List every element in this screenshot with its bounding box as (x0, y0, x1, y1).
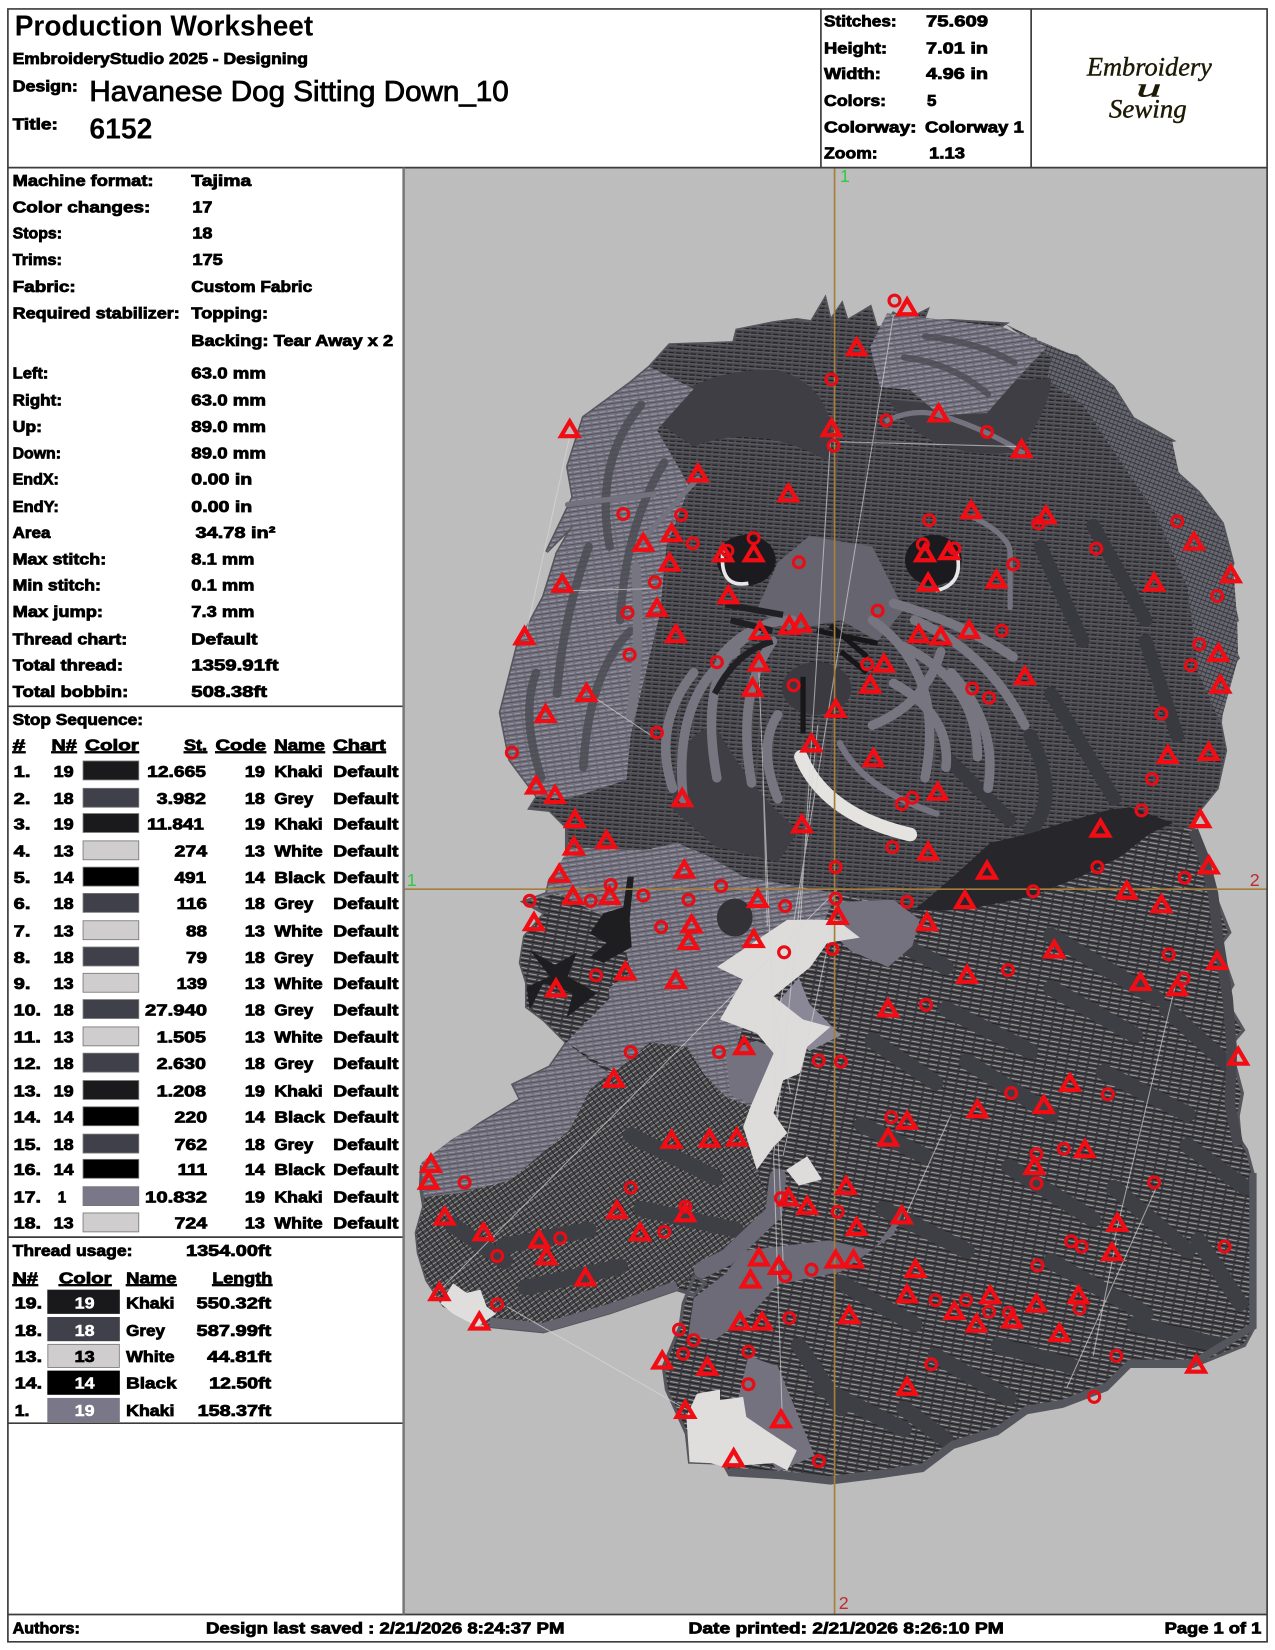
thread row 13: 13 (75, 1349, 95, 1366)
design stats block: Colorway: (824, 119, 917, 136)
design stats block: Zoom: (824, 146, 878, 163)
thread row 18: 18. (15, 1323, 42, 1340)
machine details list: Machine format: (13, 173, 153, 190)
stop row 10: 18 (245, 1002, 265, 1019)
logo: Embroidery (1086, 53, 1212, 82)
stop row 11 (14, 1027, 399, 1047)
table header (13, 737, 387, 754)
crosshair vertical (834, 168, 836, 1614)
machine details list: 63.0 mm (191, 393, 266, 410)
stop row 2: 2. (14, 791, 30, 808)
stop row 7: White (274, 924, 323, 941)
stop row 6: Grey (274, 896, 313, 913)
thread row 19: 19. (15, 1296, 42, 1313)
stop row 3: 3. (14, 816, 30, 833)
stop row 8: Grey (274, 950, 313, 967)
stop row 14: Default (333, 1110, 399, 1127)
stop row 1: 1. (14, 764, 30, 781)
machine details list: 7.3 mm (191, 604, 254, 621)
stop sequence heading: Stop Sequence: (13, 712, 143, 729)
title: Production Worksheet (15, 11, 314, 43)
machine details list: Stops: (13, 226, 62, 243)
logo: Sewing (1109, 95, 1187, 124)
stop row 16: Default (333, 1162, 399, 1179)
stop row 6 (14, 893, 399, 913)
axis labels: 2 (1250, 870, 1260, 890)
title label: Title: (13, 116, 58, 133)
stop row 14: 14. (14, 1110, 41, 1127)
footer: Authors: (13, 1620, 80, 1637)
stop row 1: 12.665 (147, 764, 206, 781)
table header: N# (52, 737, 77, 754)
table header: Chart (333, 737, 387, 754)
footer: Design last saved : 2/21/2026 8:24:37 PM (206, 1620, 564, 1637)
machine details list: 508.38ft (191, 684, 268, 701)
stop row 8: 18 (245, 950, 265, 967)
design name: Havanese Dog Sitting Down_10 (89, 76, 509, 108)
thread row 13 (15, 1344, 272, 1367)
stop row 14: Black (274, 1110, 325, 1127)
lower right hem (729, 1173, 1253, 1480)
thread row 13: 44.81ft (207, 1349, 272, 1366)
light fur: top of head (870, 313, 1047, 415)
thread usage table (13, 1243, 272, 1422)
stop row 11: 11. (14, 1030, 41, 1047)
stop row 13: 1.208 (157, 1083, 206, 1100)
left eye (717, 535, 776, 585)
light fur: left head fringe (500, 367, 694, 799)
machine details list: Fabric: (13, 279, 76, 296)
machine details list: Default (191, 631, 258, 648)
triangle markers (420, 300, 1247, 1465)
machine details list (13, 173, 393, 701)
dog silhouette: body (416, 299, 1253, 1483)
stop row 12: 2.630 (157, 1056, 206, 1073)
machine details list: Custom Fabric (191, 279, 312, 296)
stop sequence table (13, 712, 399, 1233)
stop row 3 (14, 814, 399, 833)
stop row 2: Default (333, 791, 399, 808)
footer: Date printed: 2/21/2026 8:26:10 PM (688, 1620, 1004, 1637)
chest lower lavender patch (725, 1041, 778, 1104)
thread row 14: 14. (15, 1375, 42, 1392)
stop row 11: 13 (245, 1030, 265, 1047)
stop row 11: 13 (54, 1030, 74, 1047)
stop row 13: Default (333, 1083, 399, 1100)
stop row 16: Black (274, 1162, 325, 1179)
stop row 16: 14 (245, 1162, 265, 1179)
lavender star on chest (773, 978, 841, 1051)
forearm bottom hem (490, 1285, 677, 1328)
machine details list: Down: (13, 445, 61, 462)
thread table header (13, 1270, 272, 1287)
stop row 14 (14, 1107, 399, 1127)
stop row 2: Grey (274, 791, 313, 808)
stop row 3: 11.841 (147, 816, 204, 833)
axis labels: 1 (407, 870, 417, 890)
stop row 13 (14, 1081, 399, 1100)
stop row 5: 14 (245, 870, 265, 887)
stop row 5: 5. (14, 870, 30, 887)
stop row 7: Default (333, 924, 399, 941)
stop row 1 (14, 761, 399, 781)
thread row 18 (15, 1317, 272, 1341)
axis labels: 1 (840, 166, 850, 186)
machine details list: Max stitch: (13, 551, 106, 568)
stop row 3: Khaki (274, 816, 323, 833)
stop row 3: 19 (54, 816, 74, 833)
stop row 5 (14, 867, 399, 887)
paw fur rays (688, 1209, 904, 1340)
machine details list: Up: (13, 419, 42, 436)
stop row 18: 724 (174, 1216, 207, 1233)
stop row 1: Default (333, 764, 399, 781)
thread row 18: 18 (75, 1323, 95, 1340)
thread row 19 (15, 1290, 272, 1314)
stop row 14: 14 (245, 1110, 265, 1127)
thread row 14 (15, 1371, 272, 1395)
stop row 7: 13 (245, 924, 265, 941)
right chest light fur (840, 900, 920, 967)
logo (1086, 53, 1212, 124)
stop row 8: 18 (54, 950, 74, 967)
stop row 16: 16. (14, 1162, 41, 1179)
stop row 17: Khaki (274, 1189, 323, 1206)
leg divider light fur (702, 1177, 778, 1270)
machine details list: 8.1 mm (191, 551, 254, 568)
stop row 8 (14, 947, 399, 967)
stop row 7: 13 (54, 924, 74, 941)
stop row 16: 111 (178, 1162, 207, 1179)
design label: Design: (13, 78, 78, 95)
stop row 4: 274 (174, 844, 207, 861)
stop row 12: 18 (245, 1056, 265, 1073)
tongue (801, 757, 910, 835)
forearm texture (416, 1043, 774, 1332)
machine details list: Left: (13, 365, 48, 382)
stop row 9: Default (333, 976, 399, 993)
thread row 1: 1. (15, 1403, 29, 1420)
muzzle fur rays (631, 568, 1025, 799)
stop row 4: Default (333, 844, 399, 861)
machine details list: 18 (192, 226, 213, 243)
thread row 19: 550.32ft (197, 1296, 272, 1313)
thread row 14: 12.50ft (209, 1375, 272, 1392)
machine details list: 175 (192, 252, 223, 269)
table header: Code (215, 737, 266, 754)
machine details list: EndX: (13, 472, 59, 489)
stop row 3: 19 (245, 816, 265, 833)
stop row 17: 10.832 (145, 1189, 207, 1206)
stop row 2 (14, 788, 399, 808)
stop row 18 (14, 1213, 399, 1233)
white chest fur (717, 920, 860, 1170)
design stats block: Height: (824, 41, 887, 58)
design stats block: Stitches: (824, 13, 897, 30)
machine details list: EndY: (13, 499, 59, 516)
table header: Name (274, 737, 325, 754)
machine details list: 17 (192, 199, 213, 216)
machine details list: Trims: (13, 252, 62, 269)
thread table header: N# (13, 1270, 38, 1287)
machine details list: Area (13, 525, 51, 542)
stop row 1: 19 (245, 764, 265, 781)
thread usage heading (13, 1243, 272, 1260)
thread table header: Color (59, 1270, 111, 1287)
stop row 18: 13 (245, 1216, 265, 1233)
thread row 18: Grey (126, 1323, 165, 1340)
stop row 13: 19 (54, 1083, 74, 1100)
upper arm light fur (422, 1043, 610, 1197)
stop row 16: 14 (54, 1162, 74, 1179)
left paw white (440, 1283, 496, 1326)
machine details list: 1359.91ft (191, 658, 280, 675)
machine details list: Thread chart: (13, 631, 127, 648)
stop row 4: 4. (14, 844, 30, 861)
machine details list: Max jump: (13, 604, 103, 621)
stop row 10: Grey (274, 1002, 313, 1019)
cheek dark tufts (946, 526, 1177, 830)
stop row 8: 8. (14, 950, 30, 967)
design stats block: Colors: (824, 93, 886, 110)
design stats block: Width: (824, 66, 881, 83)
machine details list: Tajima (191, 173, 252, 190)
thread row 1: 19 (75, 1403, 95, 1420)
machine details list: 89.0 mm (191, 445, 266, 462)
thread row 1: Khaki (126, 1403, 174, 1420)
design stats block: 1.13 (929, 146, 965, 163)
machine details list: 0.1 mm (191, 578, 254, 595)
chin fur arc (840, 743, 937, 814)
crosshair horizontal (405, 888, 1267, 890)
stop row 10: 10. (14, 1002, 41, 1019)
thread row 14: Black (126, 1375, 177, 1392)
stop row 8: Default (333, 950, 399, 967)
machine details list: 89.0 mm (191, 419, 266, 436)
design stats block (824, 13, 1024, 163)
embroidered dog illustration (416, 299, 1253, 1483)
stop row 18: Default (333, 1216, 399, 1233)
machine details list: Min stitch: (13, 578, 101, 595)
thread row 19: 19 (75, 1296, 95, 1313)
thread row 13: 13. (15, 1349, 42, 1366)
logo: u (1136, 74, 1161, 103)
stop row 6: Default (333, 896, 399, 913)
software line: EmbroideryStudio 2025 - Designing (13, 51, 308, 68)
neck light fur (523, 843, 837, 1107)
machine details list: Required stabilizer: (13, 305, 180, 322)
machine details list: Total bobbin: (13, 684, 128, 701)
stop row 10 (14, 1000, 399, 1019)
stop row 17: 19 (245, 1189, 265, 1206)
collar (913, 807, 1173, 910)
stop row 15: 18 (245, 1137, 265, 1154)
left fringe dark strands (529, 405, 664, 778)
stop row 11: 1.505 (157, 1030, 206, 1047)
axis labels (407, 166, 1260, 1613)
machine details list: 63.0 mm (191, 365, 266, 382)
footer: Page 1 of 1 (1165, 1620, 1262, 1637)
design stats block: 4.96 in (926, 66, 988, 83)
right eye (905, 535, 962, 591)
stop row 15: 18 (54, 1137, 74, 1154)
stop row 7: 7. (14, 924, 30, 941)
stop row 2: 18 (245, 791, 265, 808)
stop row 15: Grey (274, 1137, 313, 1154)
stop row 1: 19 (54, 764, 74, 781)
stop row 9 (14, 973, 399, 993)
dark neck oval (717, 899, 753, 937)
thread usage heading: 1354.00ft (186, 1243, 272, 1260)
stop row 18: White (274, 1216, 323, 1233)
stop row 15: 15. (14, 1137, 41, 1154)
stop row 18: 18. (14, 1216, 41, 1233)
stop row 10: 18 (54, 1002, 74, 1019)
stop row 17: 1 (58, 1189, 66, 1206)
stop row 5: Black (274, 870, 325, 887)
stop row 2: 18 (54, 791, 74, 808)
stop row 6: 116 (177, 896, 207, 913)
stop row 11: White (274, 1030, 323, 1047)
stop row 6: 18 (54, 896, 74, 913)
design stats block: Colorway 1 (925, 119, 1024, 136)
head right fringe (1005, 324, 1238, 723)
table header: # (13, 737, 26, 754)
stop row 9: 139 (177, 976, 207, 993)
stop row 4: 13 (245, 844, 265, 861)
stop row 9: 13 (54, 976, 74, 993)
machine details list: 0.00 in (191, 499, 252, 516)
stop row 13: 13. (14, 1083, 41, 1100)
stop row 12: 12. (14, 1056, 41, 1073)
table header: St. (184, 737, 207, 754)
stop row 14: 14 (54, 1110, 74, 1127)
stop row 15: Default (333, 1137, 399, 1154)
stop row 12 (14, 1053, 399, 1073)
machine details list: 0.00 in (191, 472, 252, 489)
table header: Color (85, 737, 139, 754)
stop row 5: 14 (54, 870, 74, 887)
stop row 4 (14, 841, 399, 861)
machine details list: Color changes: (13, 199, 150, 216)
stop row 9: White (274, 976, 323, 993)
stop row 7 (14, 921, 399, 941)
stop and trim markers (420, 295, 1247, 1466)
stop row 8: 79 (186, 950, 207, 967)
circle markers (459, 295, 1230, 1466)
stop row 12: Grey (274, 1056, 313, 1073)
stop row 4: White (274, 844, 323, 861)
head dark patches (652, 370, 1051, 862)
thread jump lines (440, 315, 1177, 1410)
stop row 18: 13 (54, 1216, 74, 1233)
footer (13, 1620, 1262, 1637)
left cheek mid fur (520, 913, 610, 1043)
stop row 9: 9. (14, 976, 30, 993)
stop row 10: 27.940 (145, 1002, 207, 1019)
stop row 7: 88 (186, 924, 207, 941)
stop row 15: 762 (174, 1137, 207, 1154)
axis labels: 2 (839, 1593, 849, 1613)
black neck patch 1 (527, 950, 597, 1017)
stop row 2: 3.982 (157, 791, 206, 808)
thread row 14: 14 (75, 1375, 95, 1392)
thread row 18: 587.99ft (197, 1323, 272, 1340)
stop row 4: 13 (54, 844, 74, 861)
muzzle bridge (757, 536, 904, 641)
thread row 1 (15, 1398, 272, 1422)
design stats block: 75.609 (926, 13, 988, 30)
front paw white (686, 1390, 797, 1470)
design stats block: 7.01 in (926, 41, 988, 58)
muzzle stripes (715, 604, 783, 694)
front paw lavender (736, 1356, 815, 1472)
stop row 15 (14, 1134, 399, 1154)
machine details list: Backing: Tear Away x 2 (191, 333, 393, 350)
stop row 6: 18 (245, 896, 265, 913)
stop row 17: Default (333, 1189, 399, 1206)
stop row 11: Default (333, 1030, 399, 1047)
stop row 12: 18 (54, 1056, 74, 1073)
stop row 9: 13 (245, 976, 265, 993)
stop row 13: Khaki (274, 1083, 323, 1100)
thread table header: Length (212, 1270, 272, 1287)
left panel divider (402, 168, 405, 1614)
stop row 13: 19 (245, 1083, 265, 1100)
black neck patch 2 (590, 877, 634, 963)
machine details list: Total thread: (13, 658, 123, 675)
machine details list: Topping: (191, 305, 268, 322)
body fur tufts (452, 925, 1246, 1440)
top of head dark strands (904, 336, 1014, 394)
machine details list: 34.78 in² (196, 525, 275, 542)
chest lower white spot (786, 1156, 822, 1186)
stop row 12: Default (333, 1056, 399, 1073)
thread row 19: Khaki (126, 1296, 174, 1313)
thread row 1: 158.37ft (198, 1403, 272, 1420)
title block (13, 11, 509, 146)
nose (782, 625, 878, 734)
thread usage heading: Thread usage: (13, 1243, 132, 1260)
stop row 17 (14, 1187, 399, 1206)
right edge fringe (1193, 830, 1238, 1146)
stop row 6: 6. (14, 896, 30, 913)
design canvas (405, 168, 1267, 1614)
design stats block: 5 (927, 93, 937, 110)
eyebrow arcs (568, 412, 1023, 608)
thread row 13: White (126, 1349, 175, 1366)
stop row 16 (14, 1159, 399, 1179)
stop row 17: 17. (14, 1189, 41, 1206)
stop row 3: Default (333, 816, 399, 833)
stop row 5: Default (333, 870, 399, 887)
thread table header: Name (126, 1270, 177, 1287)
stop row 5: 491 (174, 870, 206, 887)
stop row 10: Default (333, 1002, 399, 1019)
machine details list: Right: (13, 393, 62, 410)
head mesh (500, 299, 1238, 910)
title number: 6152 (89, 114, 152, 146)
stop row 1: Khaki (274, 764, 323, 781)
stop row 14: 220 (174, 1110, 207, 1127)
